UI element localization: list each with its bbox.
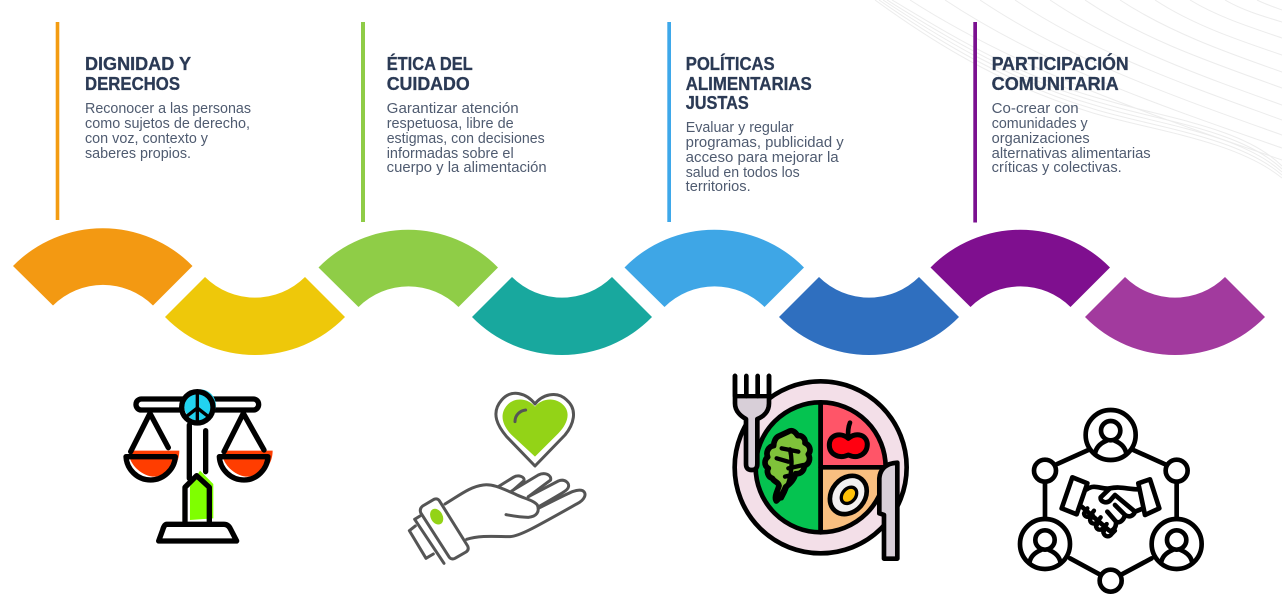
heading: dignidad y derechos: DIGNIDAD Y (85, 54, 191, 74)
icon: scales of justice with peace symbol (126, 389, 273, 541)
arch: purple (930, 230, 1110, 307)
plate: red quadrant (821, 402, 886, 467)
panel: ética del cuidado (361, 22, 547, 222)
arch: magenta (1085, 277, 1265, 355)
plate: green half (756, 402, 821, 532)
icon: community network with handshake (1020, 410, 1202, 592)
blue divider bar (667, 22, 671, 222)
knife (879, 463, 897, 559)
text block: dignidad: como sujetos de derecho, (85, 116, 250, 132)
arch: teal (472, 277, 652, 355)
text block: participación: críticas y colectivas. (992, 160, 1122, 176)
plate: peach quadrant (821, 467, 886, 532)
text block: participación (992, 101, 1151, 176)
text block: políticas: salud en todos los (686, 165, 800, 181)
heading: políticas alimentarias justas: ALIMENTARIAS (686, 74, 812, 94)
panel: políticas alimentarias justas (667, 22, 844, 222)
panel: dignidad y derechos (56, 22, 251, 220)
arch: dark blue (779, 277, 959, 355)
heading: políticas alimentarias justas: POLÍTICAS (686, 53, 775, 74)
text block: ética (387, 101, 547, 176)
heading: ética del cuidado (387, 53, 473, 94)
text block: ética: estigmas, con decisiones (387, 131, 545, 147)
handshake (1062, 477, 1159, 536)
panel: participación comunitaria (973, 22, 1151, 222)
text block: políticas: acceso para mejorar la (686, 150, 840, 166)
text block: políticas: programas, publicidad y (686, 135, 844, 151)
network links (1045, 450, 1177, 575)
heading: ética del cuidado: ÉTICA DEL (387, 53, 473, 74)
text block: dignidad: saberes propios. (85, 146, 191, 162)
heading: políticas alimentarias justas: JUSTAS (686, 93, 749, 113)
icon: hand holding a heart (409, 393, 585, 563)
text block: participación: comunidades y (992, 116, 1088, 132)
text block: ética: cuerpo y la alimentación (387, 160, 547, 176)
arch: light blue (624, 230, 804, 307)
text block: ética: Garantizar atención (387, 101, 519, 117)
orange divider bar (56, 22, 59, 220)
text block: ética: informadas sobre el (387, 146, 514, 162)
arch: orange (13, 228, 192, 306)
text block: políticas (686, 120, 844, 195)
heading: políticas alimentarias justas (686, 53, 812, 113)
egg (822, 468, 874, 522)
lettuce (765, 431, 810, 501)
small nodes (1034, 460, 1188, 592)
text block: dignidad: con voz, contexto y (85, 131, 209, 147)
apple (829, 423, 867, 457)
person: top (1086, 410, 1136, 460)
person: right (1152, 519, 1202, 569)
arch: green (318, 230, 498, 307)
text block: dignidad: Reconocer a las personas (85, 101, 251, 117)
heading: dignidad y derechos (85, 54, 191, 94)
person: left (1020, 519, 1070, 569)
wave of coloured arches (13, 228, 1265, 355)
green divider bar (361, 22, 365, 222)
text block: políticas: Evaluar y regular (686, 120, 794, 136)
heading: dignidad y derechos: DERECHOS (85, 74, 180, 94)
text block: dignidad (85, 101, 251, 162)
text block: participación: organizaciones (992, 131, 1090, 147)
heading: participación comunitaria: COMUNITARIA (992, 74, 1119, 94)
icon: plate of food with fork and knife (735, 376, 907, 559)
text block: participación: alternativas alimentarias (992, 146, 1151, 162)
fork (735, 376, 769, 470)
text block: ética: respetuosa, libre de (387, 116, 514, 132)
heading: participación comunitaria: PARTICIPACIÓN (992, 53, 1129, 74)
text block: políticas: territorios. (686, 179, 751, 195)
heading: participación comunitaria (992, 53, 1129, 94)
heading: ética del cuidado: CUIDADO (387, 74, 470, 94)
purple divider bar (973, 22, 977, 222)
text block: participación: Co-crear con (992, 101, 1079, 117)
arch: yellow (165, 277, 345, 355)
